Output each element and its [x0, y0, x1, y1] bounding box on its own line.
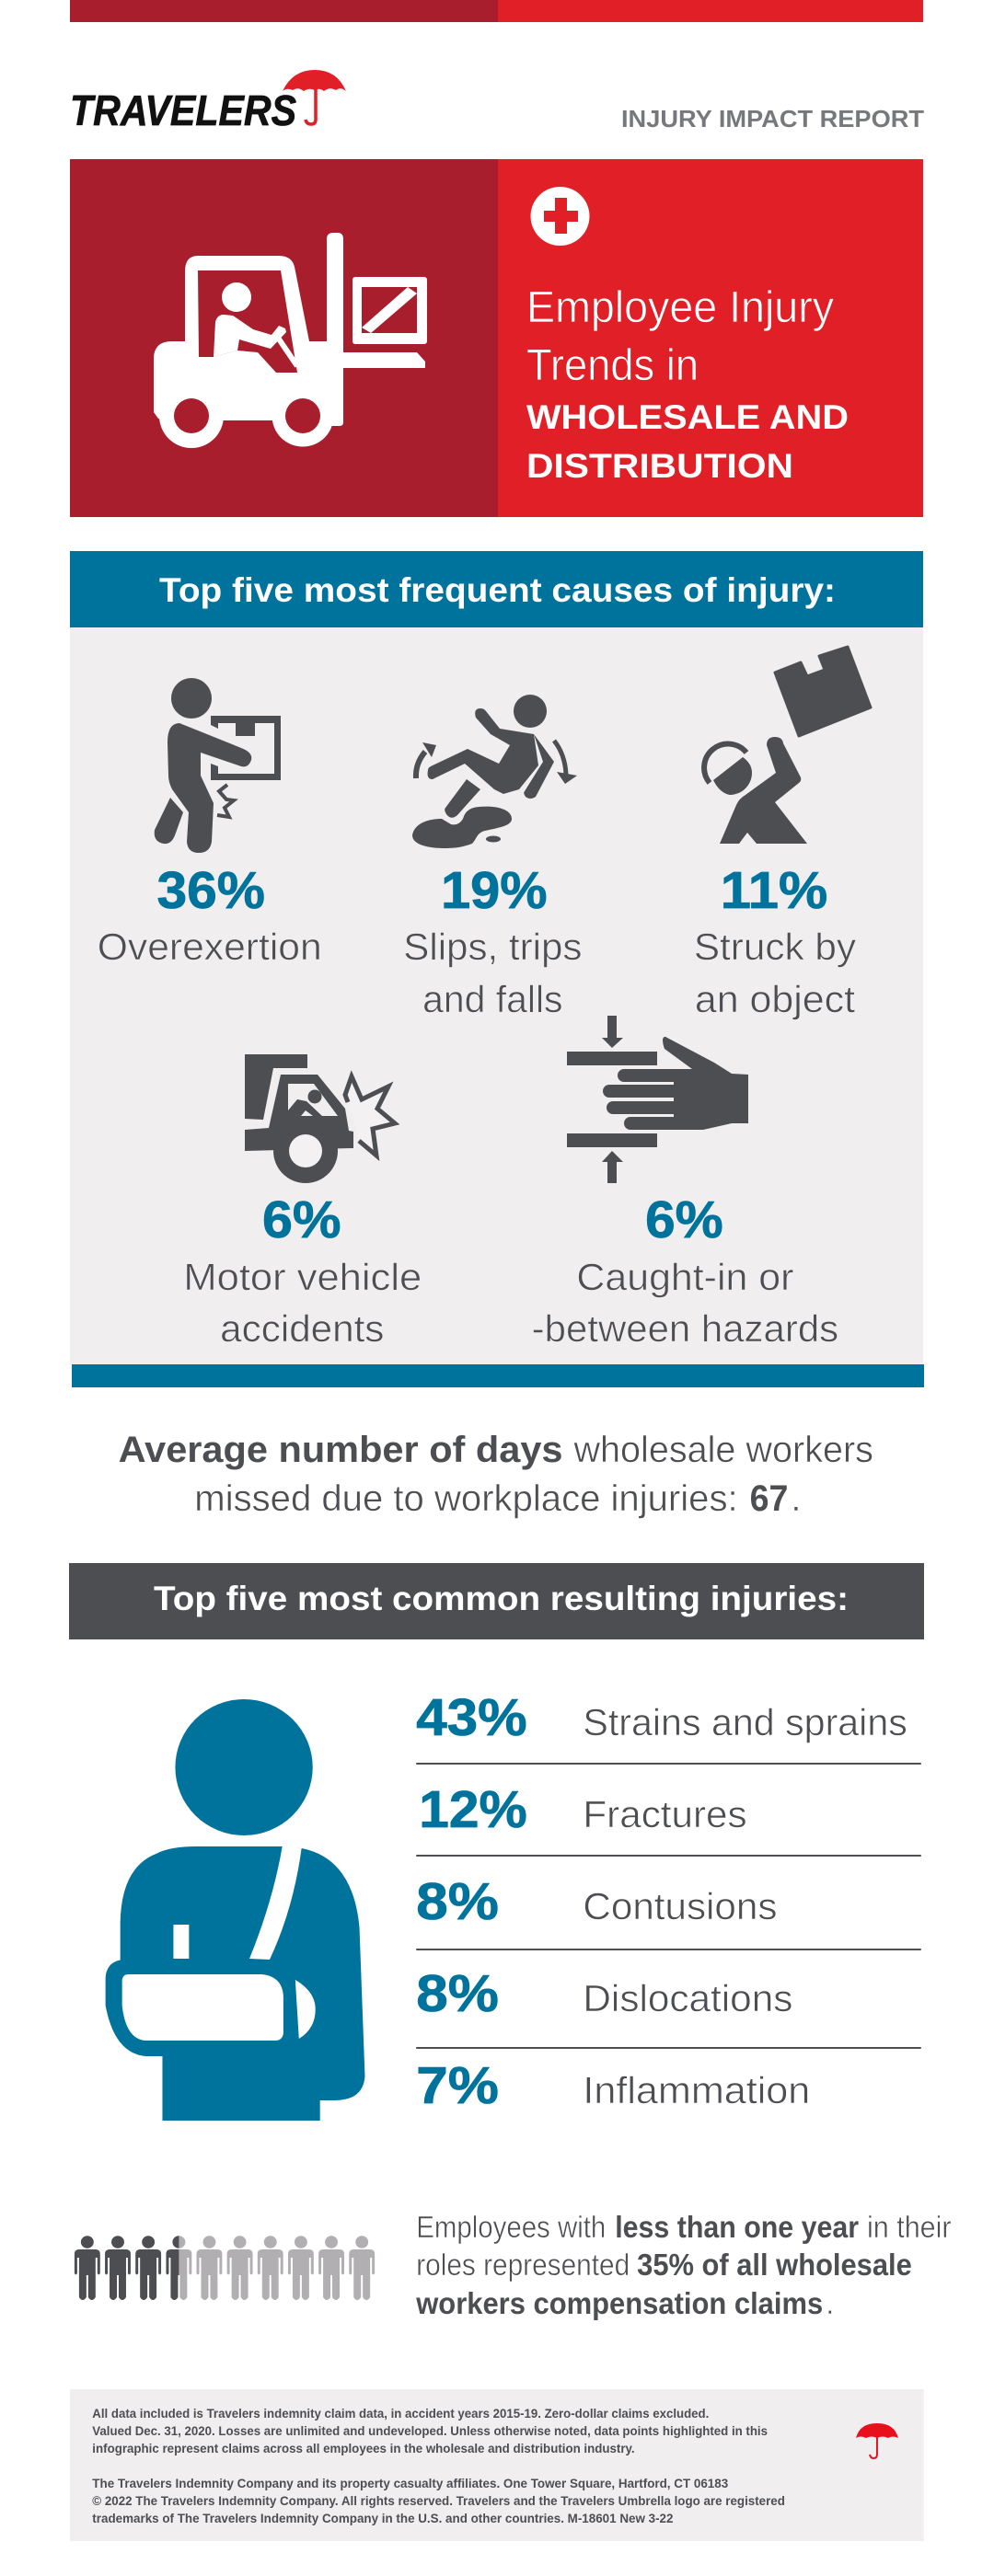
icon: motor vehicle accident	[245, 1054, 395, 1183]
blue bottom band	[72, 1364, 924, 1387]
text: new employee claims	[415, 2210, 952, 2320]
heading: resulting injuries	[69, 1563, 924, 1639]
stat: caught-in or -between hazards: -between hazards	[532, 1307, 838, 1350]
list: resulting injuries	[416, 1689, 921, 2115]
pictogram: 35 percent of workers	[75, 2236, 375, 2300]
row: dislocations	[416, 1965, 792, 2023]
logo: Travelers	[70, 70, 346, 134]
footer disclaimer text: trademarks of The Travelers Indemnity Company in the U.S. and other countries. M-18601 New 3-22	[92, 2512, 673, 2525]
row: contusions: 8%	[416, 1873, 499, 1931]
footer disclaimer text: The Travelers Indemnity Company and its property casualty affiliates. One Tower Square, Hartford, CT 06183	[92, 2477, 728, 2490]
stat: struck by an object: Struck by	[694, 926, 857, 968]
text: new employee claims: workers compensation claims	[415, 2286, 823, 2320]
text: new employee claims: Employees with	[416, 2210, 606, 2244]
average days missed	[119, 1430, 873, 1519]
icon: medical cross	[530, 187, 589, 246]
icon: overexertion	[155, 678, 281, 853]
icon: struck by an object	[704, 647, 871, 844]
stat: slips, trips and falls: and falls	[422, 978, 563, 1020]
hero title: WHOLESALE AND	[526, 398, 849, 436]
row: inflammation	[416, 2057, 810, 2115]
icon: person with arm sling	[106, 1699, 364, 2121]
stat: caught-in or -between hazards	[532, 1191, 838, 1350]
text: new employee claims: .	[826, 2286, 834, 2320]
stat: caught-in or -between hazards: Caught-in or	[576, 1256, 793, 1298]
stat: slips, trips and falls: Slips, trips	[403, 926, 582, 968]
text: new employee claims: in their	[867, 2210, 952, 2244]
stat: overexertion: Overexertion	[98, 926, 322, 968]
footer disclaimer text: All data included is Travelers indemnity claim data, in accident years 2015-19. Zero-dollar claims excluded.	[92, 2407, 709, 2421]
average days missed: wholesale workers	[572, 1430, 873, 1470]
average days missed: 67	[750, 1478, 788, 1519]
stat: struck by an object: 11%	[721, 862, 827, 920]
heading: causes: Top five most frequent causes of injury:	[159, 571, 836, 609]
average days missed: .	[791, 1478, 801, 1519]
heading: causes	[70, 551, 923, 627]
row: fractures: Fractures	[583, 1793, 747, 1835]
icon: forklift	[154, 233, 427, 448]
row: contusions	[416, 1873, 777, 1931]
stat: struck by an object: an object	[695, 978, 856, 1020]
hero title: Employee Injury	[526, 283, 834, 332]
hero title: Trends in	[526, 341, 699, 390]
hero title: DISTRIBUTION	[526, 447, 793, 485]
icon: slips, trips and falls	[412, 695, 577, 848]
text: new employee claims: 35% of all wholesale	[637, 2248, 912, 2282]
row: dislocations: 8%	[416, 1965, 499, 2023]
hero title	[526, 283, 849, 485]
logo: Travelers: TRAVELERS	[70, 86, 296, 134]
footer disclaimer text	[92, 2407, 785, 2525]
text: new employee claims: less than one year	[615, 2210, 859, 2244]
row: contusions: Contusions	[583, 1885, 777, 1927]
top color bar	[70, 0, 923, 22]
stat: motor vehicle accidents	[183, 1191, 422, 1350]
stat: caught-in or -between hazards: 6%	[645, 1191, 723, 1249]
panel: causes of injury	[70, 551, 923, 1365]
icon: caught-in hazard	[567, 1016, 748, 1183]
stat: struck by an object	[694, 862, 857, 1020]
row: fractures	[419, 1781, 747, 1839]
report label: INJURY IMPACT REPORT	[621, 105, 924, 132]
row: strains and sprains: Strains and sprains	[583, 1701, 907, 1743]
row: fractures: 12%	[419, 1781, 527, 1839]
footer disclaimer text: infographic represent claims across all employees in the wholesale and distribution industry.	[92, 2442, 635, 2455]
footer disclaimer text: Valued Dec. 31, 2020. Losses are unlimited and undeveloped. Unless otherwise noted, data points highlighted in this	[92, 2424, 768, 2438]
stat: motor vehicle accidents: accidents	[220, 1307, 384, 1350]
stat: slips, trips and falls	[403, 862, 582, 1020]
stat: slips, trips and falls: 19%	[441, 862, 548, 920]
panel: footer	[70, 2389, 924, 2541]
text: new employee claims: roles represented	[416, 2248, 630, 2282]
average days missed: Average number of days	[119, 1430, 563, 1470]
row: strains and sprains: 43%	[416, 1689, 527, 1747]
stat: motor vehicle accidents: Motor vehicle	[183, 1256, 422, 1298]
stat: motor vehicle accidents: 6%	[262, 1191, 341, 1249]
row: strains and sprains	[416, 1689, 907, 1747]
average days missed: missed due to workplace injuries:	[194, 1478, 738, 1519]
stat: overexertion: 36%	[157, 862, 265, 920]
stat: overexertion	[98, 862, 322, 968]
row: inflammation: 7%	[416, 2057, 499, 2115]
panel: hero	[70, 159, 923, 517]
heading: resulting injuries: Top five most common resulting injuries:	[154, 1580, 849, 1617]
row: inflammation: Inflammation	[583, 2069, 810, 2111]
row: dislocations: Dislocations	[583, 1977, 792, 2019]
icon: red umbrella	[856, 2423, 898, 2458]
footer disclaimer text: © 2022 The Travelers Indemnity Company. All rights reserved. Travelers and the Travelers Umbrella logo are registered	[92, 2494, 785, 2508]
